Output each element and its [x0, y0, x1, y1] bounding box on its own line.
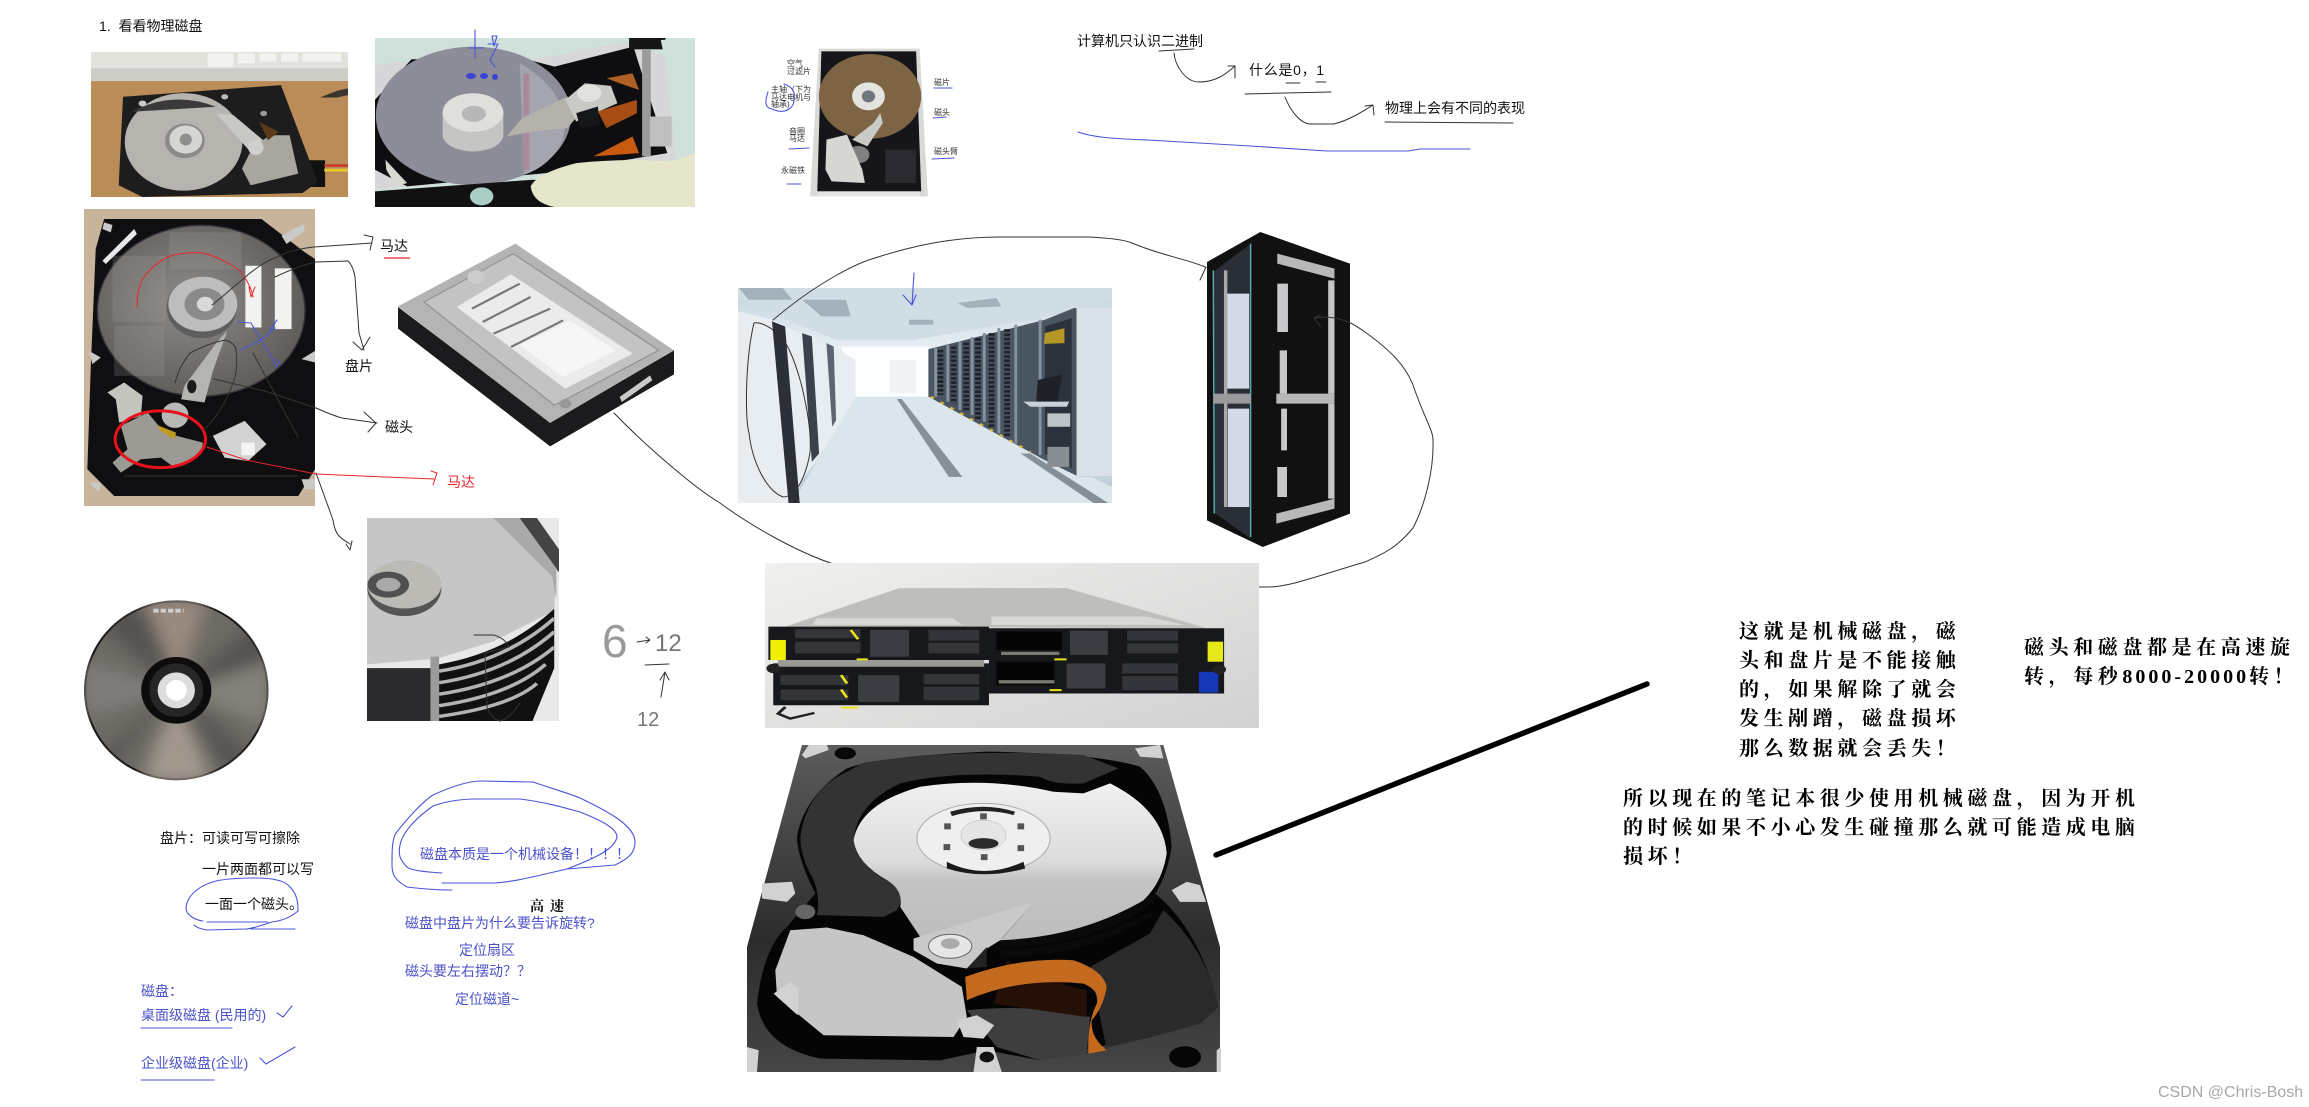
blue questions on rotation: 磁盘中盘片为什么要告诉旋转? [405, 915, 595, 931]
diagram part labels: 磁头臂 [934, 146, 958, 156]
diagram part labels: 空气 [787, 58, 803, 68]
arrow: drive to server [614, 413, 1015, 628]
arrow: server to rack [1239, 315, 1433, 587]
diagram part labels: 磁片 [934, 77, 950, 87]
hand loop around cabinet [746, 323, 810, 497]
watermark: CSDN @Chris-Bosh [2158, 1084, 2303, 1101]
text block: rotation speed: 磁头和磁盘都是在高速旋 [2024, 635, 2295, 659]
photo: hard disk labelled motor platter and head [84, 209, 315, 506]
arrow: to platter stack [253, 353, 352, 550]
diagram part labels: 磁头 [934, 107, 950, 117]
red arrow: voice coil motor [207, 447, 437, 485]
diagram part labels: 主轴（下为 [771, 84, 811, 94]
text block: laptops: 损坏！ [1623, 845, 1697, 868]
blue platter counting marks [466, 30, 498, 80]
text block: laptops [1623, 786, 2140, 868]
handwritten platter count: 12 [655, 630, 682, 657]
text block: rotation speed [2024, 635, 2298, 688]
photo: labelled hard disk diagram [810, 48, 928, 196]
long blue stroke [1078, 132, 1470, 151]
diagram part labels: 马达 [789, 133, 805, 143]
text: computers only know binary: 计算机只认识二进制 [1077, 33, 1203, 49]
photo: platter stack [367, 518, 559, 721]
diagram part labels: 永磁铁 [781, 165, 805, 175]
text: platter read write: 盘片：可读可写可擦除 [160, 830, 300, 846]
label: red motor: 马达 [447, 474, 475, 490]
text: high speed: 高速 [530, 898, 570, 915]
arrow: spindle to motor label [212, 235, 373, 305]
blue note: disk types: 磁盘： [141, 983, 183, 999]
diagram part labels [771, 58, 958, 175]
arrow: binary to 0 1 [1159, 49, 1235, 82]
photo: seagate hard disk drive [398, 244, 674, 446]
photo: hard disk with gloved hand [375, 38, 695, 207]
blue note: disk types: 企业级磁盘(企业) [141, 1055, 248, 1071]
label: motor: 马达 [380, 238, 408, 254]
blue notes on diagram [766, 84, 954, 184]
blue questions on rotation [405, 915, 595, 1007]
text block: head and platter must not touch: 的，如果解除了就会 [1739, 678, 1960, 701]
red rotation arc [137, 253, 255, 307]
label: head: 磁头 [385, 419, 413, 435]
diagram part labels: 过滤片 [787, 66, 811, 76]
blue note: disk types [141, 983, 295, 1080]
blue note: mechanical device: 磁盘本质是一个机械设备！！！！ [420, 846, 630, 862]
text block: head and platter must not touch: 这就是机械磁盘，磁 [1739, 620, 1960, 643]
photo: optical disc [84, 600, 269, 780]
blue questions on rotation: 定位扇区 [459, 942, 515, 958]
text block: rotation speed: 转，每秒8000-20000转！ [2024, 665, 2298, 688]
blue note: disk types: 桌面级磁盘 (民用的) [141, 1007, 266, 1023]
blue swing marks on platter [238, 320, 280, 367]
arrow: head label [214, 379, 377, 432]
arrow: cabinet to rack [773, 237, 1206, 320]
blue circle round head text [186, 878, 298, 930]
handwritten platter count [602, 615, 682, 731]
hand-drawn arm outline [175, 340, 237, 430]
photo: opened hard disk on wooden desk [91, 52, 348, 197]
photo: large open hard disk render [747, 745, 1221, 1072]
photo: data centre aisle [738, 288, 1112, 503]
text block: laptops: 所以现在的笔记本很少使用机械磁盘，因为开机 [1623, 786, 2140, 810]
blue questions on rotation: 磁头要左右摆动？？ [405, 963, 531, 979]
text block: head and platter must not touch: 发生剐蹭，磁盘损坏 [1739, 707, 1960, 730]
underline physical [1385, 122, 1513, 123]
blue note: mechanical device [392, 781, 635, 890]
diagram part labels: 轴承) [771, 99, 790, 109]
arrow: 0 1 to physical [1245, 82, 1374, 124]
hand mark across stack [474, 635, 520, 721]
text: one head per side: 一面一个磁头。 [205, 896, 303, 912]
text block: laptops: 的时候如果不小心发生碰撞那么就可能造成电脑 [1623, 816, 2140, 839]
text: physical representation: 物理上会有不同的表现 [1385, 100, 1525, 116]
blue questions on rotation: 定位磁道~ [455, 991, 519, 1007]
thick callout line [1216, 684, 1647, 855]
text block: head and platter must not touch: 头和盘片是不能接触 [1739, 649, 1960, 672]
diagram part labels: 马达电机与 [771, 92, 811, 102]
photo: dual node rack server [765, 563, 1259, 728]
arrow: platter label [275, 261, 370, 350]
title: 1. 看看物理磁盘 [99, 18, 202, 34]
text block: head and platter must not touch [1739, 620, 1960, 760]
label: platter: 盘片 [345, 358, 373, 374]
handwritten platter count: 12 [637, 709, 659, 731]
photo: server rack cabinet [1207, 232, 1350, 547]
diagram part labels: 音圈 [789, 126, 805, 136]
text: what are 0 and 1: 什么是0，1 [1249, 62, 1325, 78]
handwritten platter count: 6 [602, 615, 628, 667]
text: both sides: 一片两面都可以写 [202, 861, 314, 877]
text block: head and platter must not touch: 那么数据就会丢失！ [1739, 737, 1960, 760]
blue arrow on ceiling [903, 273, 916, 305]
